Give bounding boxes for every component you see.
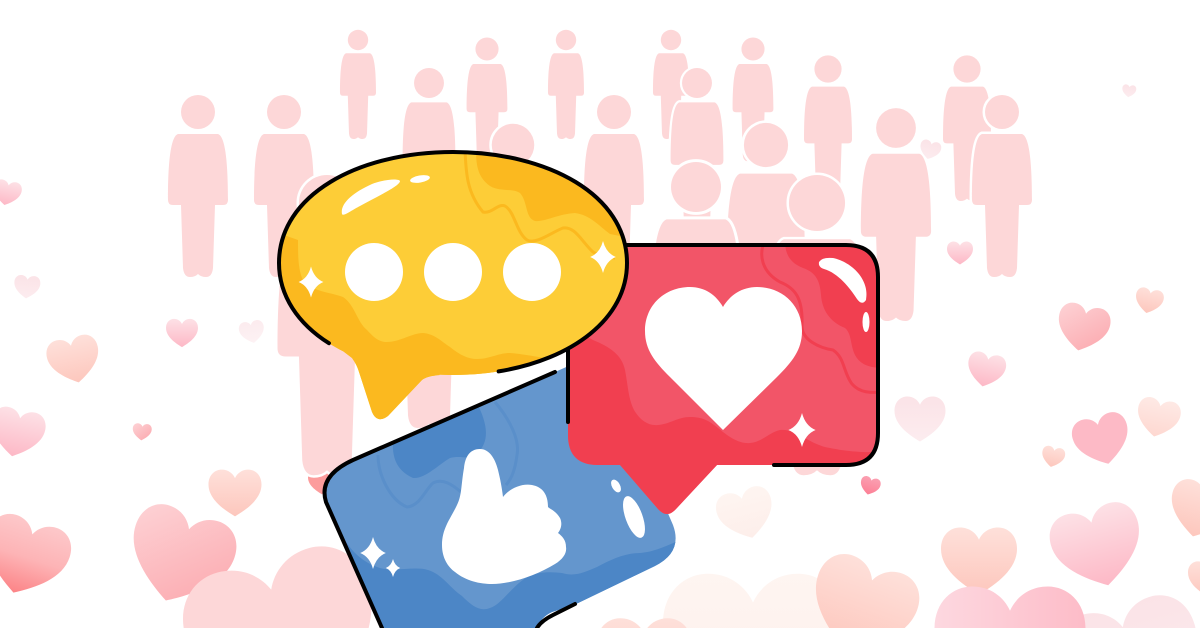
like bubble outline	[325, 372, 575, 628]
icon: blue thumbs-up bubble	[322, 367, 676, 628]
icon: white thumb	[442, 449, 566, 584]
sparkles on chat bubble	[299, 241, 616, 298]
icon: yellow speech bubble	[277, 150, 629, 420]
glossy highlights on chat bubble	[342, 174, 430, 215]
icon: white heart	[645, 287, 802, 430]
heart bubble outline	[568, 245, 878, 465]
glossy highlights on like bubble	[609, 478, 650, 541]
icon: red heart bubble	[566, 243, 880, 514]
icon: sparkles on like bubble	[360, 537, 400, 577]
three white typing dots	[345, 243, 561, 301]
chat bubble outline	[279, 152, 627, 375]
icon: sparkle on heart bubble	[788, 413, 816, 447]
glossy highlights on heart bubble	[819, 258, 870, 332]
crowd of people silhouettes	[168, 30, 1032, 475]
